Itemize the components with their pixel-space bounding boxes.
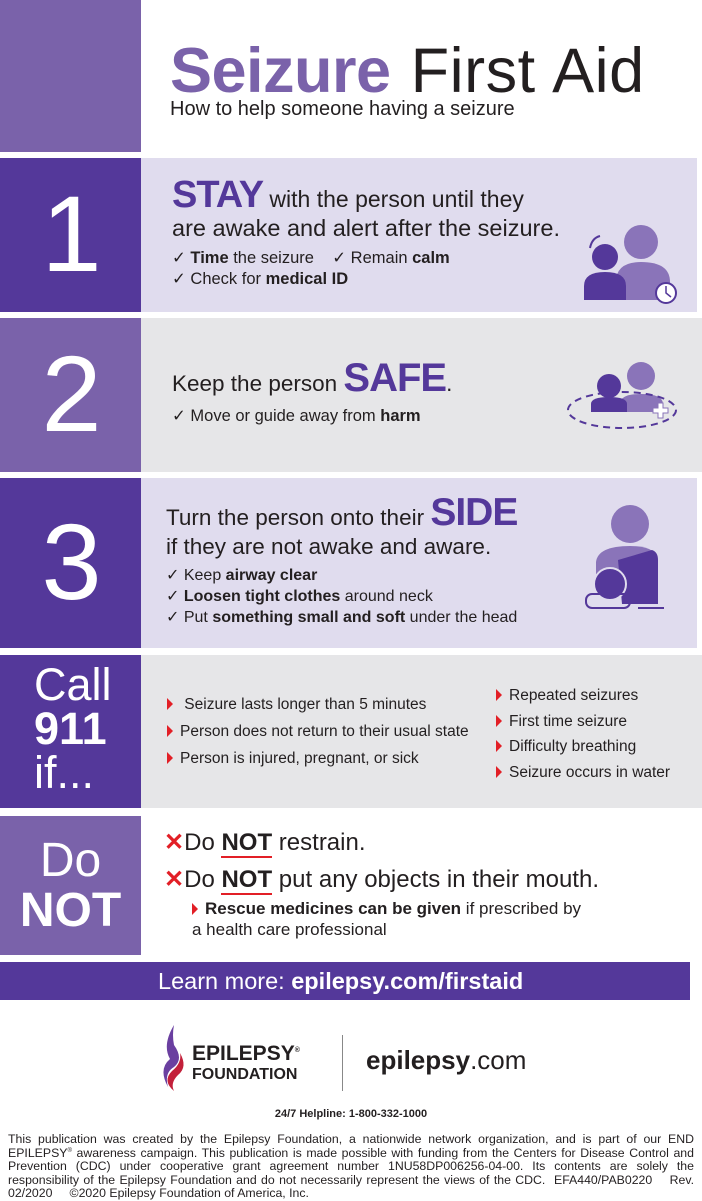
call list right: Repeated seizures	[509, 687, 638, 704]
logo	[163, 1025, 526, 1091]
do not items	[164, 829, 599, 895]
number 2: 2	[41, 333, 100, 454]
rescue medicines note	[192, 899, 581, 939]
call 911 label: Call	[34, 659, 112, 710]
disclaimer: This publication was created by the Epilepsy Foundation, a nationwide network organization, and is part of our END EPILEPSY® awareness campaign. This publication is made possible with funding from the Centers for Disease Control and Prevention (CDC) under cooperative grant agreement number 1NU58DP006256-04-00. Its contents are solely the responsibility of the Epilepsy Foundation and do not necessarily represent the views of the CDC. EFA440/PAB0220 Rev. 02/2020 ©2020 Epilepsy Foundation of America, Inc.	[8, 1132, 694, 1200]
panel: step 1	[0, 158, 697, 312]
call 911 label	[34, 659, 112, 798]
org name: EPILEPSY®	[192, 1042, 300, 1065]
call list left	[167, 696, 469, 767]
subtitle: How to help someone having a seizure	[170, 98, 515, 120]
panel: do not	[0, 816, 599, 955]
icon: flame	[163, 1025, 184, 1091]
do not label: Do	[40, 834, 101, 887]
panel: step 2	[0, 318, 702, 472]
call list left: Seizure lasts longer than 5 minutes	[184, 696, 426, 713]
call list left: Person does not return to their usual state	[180, 723, 469, 740]
org name: FOUNDATION	[192, 1066, 297, 1083]
call list left: Person is injured, pregnant, or sick	[180, 750, 419, 767]
step 1 text: ✓ Time the seizure ✓ Remain calm	[172, 249, 450, 267]
step 3 text: ✓ Loosen tight clothes around neck	[166, 588, 433, 605]
call 911 label: if...	[34, 747, 94, 798]
step 3 text: if they are not awake and aware.	[166, 534, 491, 559]
step 1 text: are awake and alert after the seizure.	[172, 215, 560, 241]
step 2 text: Keep the person SAFE.	[172, 356, 452, 400]
call list right	[496, 687, 670, 780]
rescue medicines note: a health care professional	[192, 920, 387, 939]
number 1: 1	[41, 173, 100, 294]
helpline: 24/7 Helpline: 1-800-332-1000	[275, 1108, 427, 1120]
call list right: Seizure occurs in water	[509, 764, 670, 780]
icon: recovery position	[585, 505, 664, 609]
call list right: Difficulty breathing	[509, 738, 636, 755]
title: Seizure First Aid	[170, 36, 645, 106]
website: epilepsy.com	[366, 1045, 526, 1075]
header block	[0, 0, 141, 152]
do not items: ✕Do NOT restrain.	[164, 829, 366, 856]
call list right: First time seizure	[509, 712, 627, 730]
step 3 text: ✓ Put something small and soft under the head	[166, 609, 517, 626]
icon: person with safe zone	[567, 362, 677, 429]
step 3 text: Turn the person onto their SIDE	[166, 491, 517, 534]
step 3 text: ✓ Keep airway clear	[166, 567, 317, 584]
do not label: NOT	[20, 884, 121, 937]
rescue medicines note: Rescue medicines can be given if prescribed by	[205, 899, 581, 918]
step 1 text: ✓ Check for medical ID	[172, 270, 348, 288]
step 3 text	[166, 491, 517, 626]
org name	[192, 1042, 300, 1083]
step 2 text: ✓ Move or guide away from harm	[172, 407, 421, 425]
step 1 text: STAY with the person until they	[172, 174, 524, 216]
number 3: 3	[41, 501, 100, 622]
call 911 label: 911	[34, 703, 107, 754]
step 1 text	[172, 174, 560, 288]
step 2 text	[172, 356, 452, 425]
learn more bar: Learn more: epilepsy.com/firstaid	[158, 968, 523, 994]
panel: step 3	[0, 478, 697, 648]
learn more bar	[0, 962, 690, 1000]
panel: call 911	[0, 655, 702, 808]
do not label	[20, 834, 121, 937]
icon: two people with clock	[584, 225, 677, 304]
do not items: ✕Do NOT put any objects in their mouth.	[164, 866, 599, 893]
